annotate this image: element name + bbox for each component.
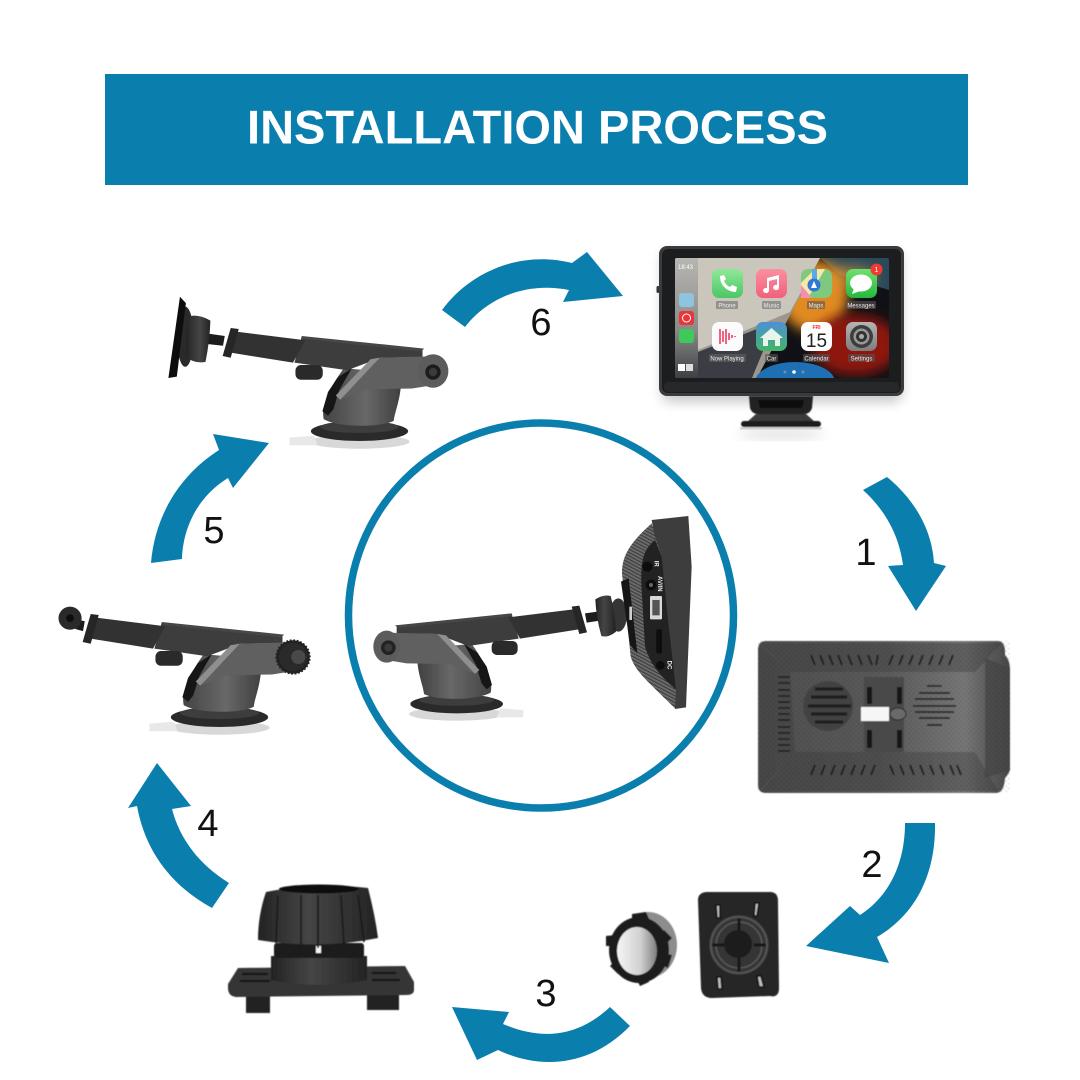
app: Car	[756, 322, 787, 362]
app: Calendar: FRI	[812, 325, 821, 331]
left vents	[778, 677, 790, 751]
arrow 5	[151, 434, 269, 563]
side dock: 18:43	[678, 265, 694, 271]
app: Maps	[801, 269, 832, 310]
top vents	[811, 655, 953, 665]
app: Music: Music	[764, 304, 779, 310]
mounting plate and locking ring	[606, 892, 779, 998]
app: Now Playing	[709, 322, 746, 362]
arrow 3	[452, 1007, 630, 1062]
wallpaper and app grid	[675, 258, 889, 378]
thread	[274, 943, 364, 958]
step number 1: 1	[855, 532, 877, 574]
app: Settings	[846, 322, 877, 362]
locking ring	[606, 912, 677, 986]
device: screen back view	[758, 641, 1010, 793]
base plate	[228, 966, 414, 997]
center circle with side view of installed screen: AV/IN	[656, 576, 662, 592]
left speaker	[803, 681, 853, 731]
step number 5: 5	[203, 510, 225, 552]
feet	[246, 994, 399, 1013]
arrow 6	[442, 252, 623, 327]
arrow 2	[806, 823, 935, 963]
app: Messages: 1	[875, 267, 879, 274]
app: Calendar: Calendar	[804, 356, 829, 362]
app: Messages	[846, 264, 882, 310]
app: Calendar	[801, 322, 832, 362]
center circle with side view of installed screen: IR	[653, 561, 659, 567]
app: Settings: Settings	[851, 356, 872, 362]
title banner	[105, 74, 968, 185]
app: Messages: Messages	[847, 304, 875, 310]
threaded knob adapter on square base	[228, 884, 414, 1013]
title banner: INSTALLATION PROCESS	[247, 100, 828, 154]
bottom vents	[811, 765, 961, 775]
app: Music	[756, 269, 787, 310]
mount with ball joint	[58, 607, 310, 735]
knurled knob	[258, 886, 378, 945]
app: Now Playing: Now Playing	[710, 356, 744, 362]
app: Phone	[712, 269, 743, 310]
arrow 4	[128, 763, 229, 908]
collar	[271, 956, 367, 985]
center circle with side view of installed screen	[348, 423, 734, 808]
suction stand	[740, 396, 822, 430]
app: Phone: Phone	[718, 304, 736, 310]
right speaker	[913, 686, 956, 725]
step number 3: 3	[535, 973, 557, 1015]
side dock	[678, 265, 694, 371]
app: Calendar: 15	[806, 331, 827, 352]
mounting plate	[861, 677, 906, 752]
step number 4: 4	[197, 803, 219, 845]
app: Car: Car	[767, 356, 776, 362]
page dots	[784, 370, 804, 374]
step number 2: 2	[861, 844, 883, 886]
backing plate	[698, 892, 779, 998]
mount with backing plate and knob	[168, 297, 448, 449]
step number 6: 6	[530, 302, 552, 344]
center circle with side view of installed screen: DC	[666, 661, 672, 670]
arrow 1	[863, 477, 946, 611]
app: Maps: Maps	[809, 304, 823, 310]
device: CarPlay screen front view	[656, 246, 904, 438]
